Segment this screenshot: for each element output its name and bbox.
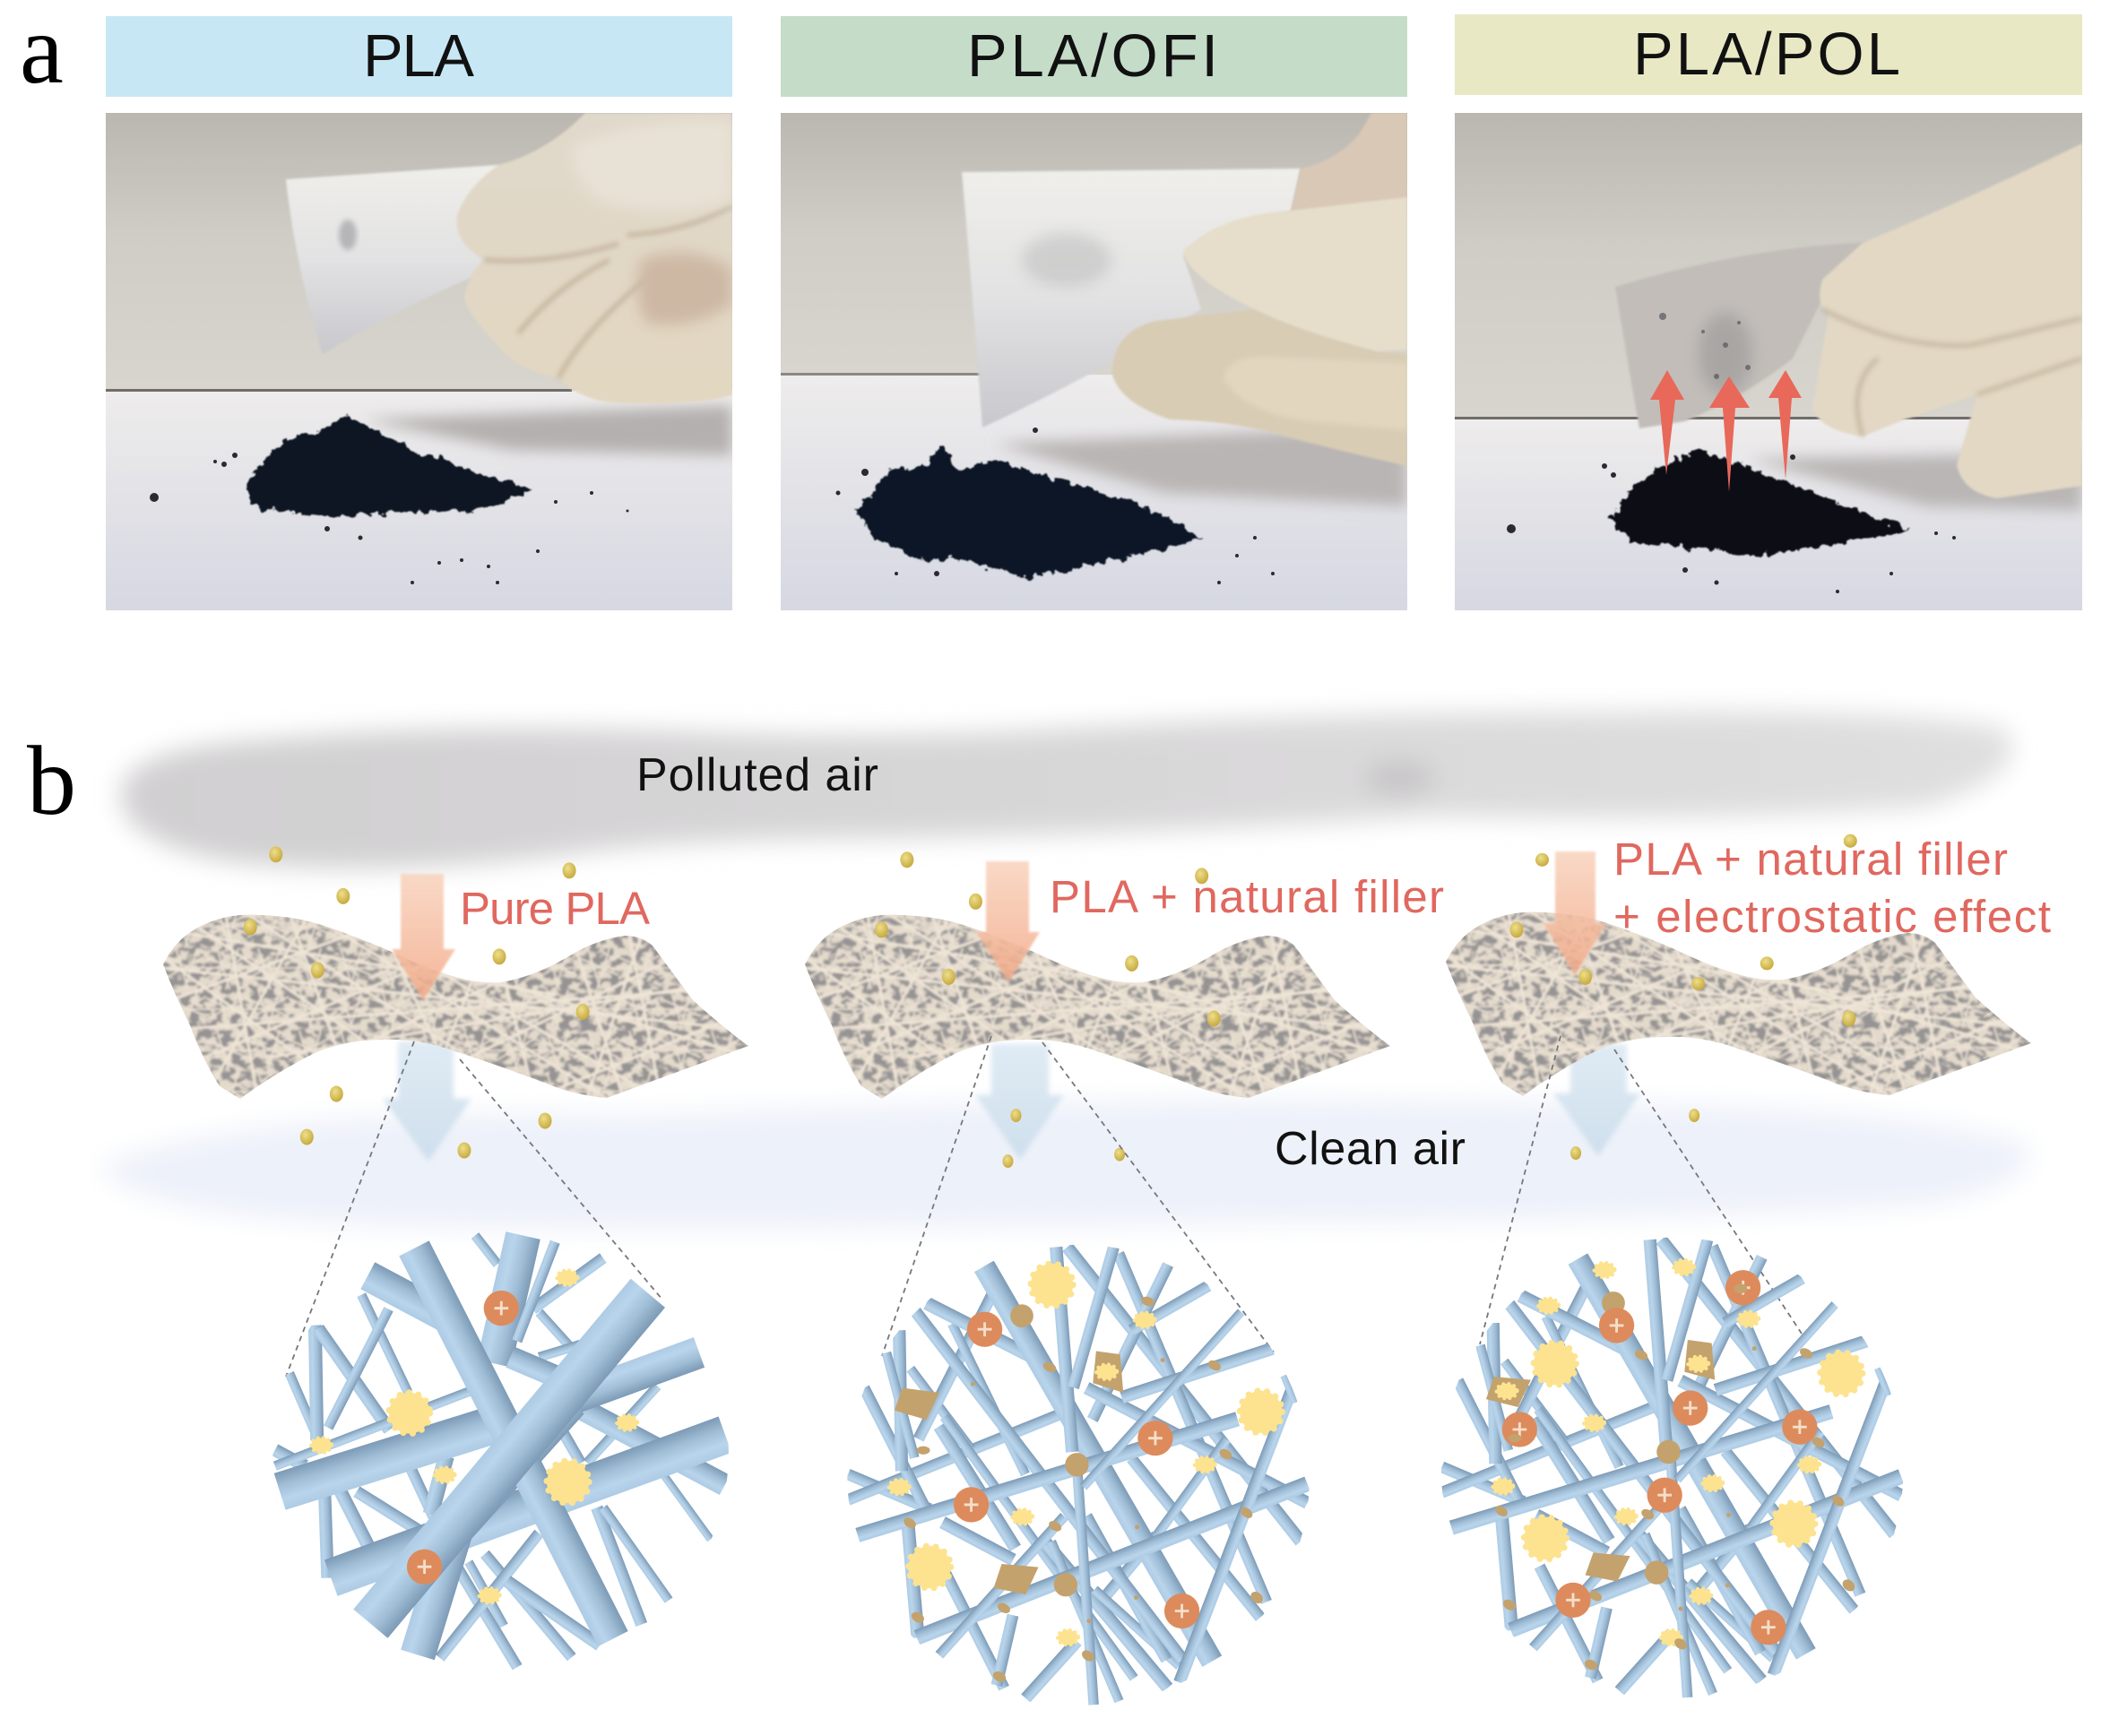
label: Clean air: Clean air bbox=[1275, 1123, 1466, 1175]
clean air band bbox=[99, 1100, 2029, 1230]
photo: PLA/OFI film above carbon powder bbox=[781, 113, 1407, 610]
membrane: PLA + natural filler bbox=[794, 901, 1404, 1111]
trapped particles bbox=[1492, 1260, 1863, 1645]
fibres bbox=[846, 1243, 1310, 1706]
membrane: PLA + natural filler + electrostatic effect bbox=[1435, 898, 2045, 1109]
label: PLA + natural filler + electrostatic effect: + electrostatic effect bbox=[1613, 891, 2051, 942]
positive charges bbox=[1502, 1270, 1817, 1645]
heading: PLA/POL: PLA/POL bbox=[1633, 21, 1900, 88]
airborne particles bbox=[244, 834, 1857, 1168]
orange polluted-air arrows bbox=[392, 851, 1606, 1000]
trapped particles bbox=[889, 1264, 1282, 1645]
panel: PLA/POL photo column bbox=[1455, 14, 2082, 610]
label: Pure PLA: Pure PLA bbox=[460, 883, 650, 934]
label: PLA + natural filler: PLA + natural filler bbox=[1050, 871, 1444, 922]
magnified fibre circle: PLA + natural filler + electrostatic effect bbox=[1440, 1236, 1904, 1697]
positive charges bbox=[407, 1291, 519, 1585]
magnified fibre circle: pure PLA bbox=[272, 1231, 731, 1670]
membrane: pure PLA bbox=[152, 901, 762, 1111]
fibres bbox=[1440, 1236, 1904, 1697]
arrows: electrostatic attraction bbox=[1650, 370, 1802, 492]
panel: PLA photo column bbox=[106, 16, 732, 610]
panel: PLA/OFI photo column bbox=[781, 16, 1407, 610]
heading: PLA/POL bbox=[1455, 14, 2082, 95]
dashed zoom guide lines bbox=[286, 1036, 1802, 1377]
trapped particles bbox=[311, 1270, 637, 1603]
filler flakes on top of charges bbox=[1508, 1283, 1747, 1652]
heading: PLA/OFI bbox=[781, 16, 1407, 97]
polluted air cloud bbox=[121, 712, 2012, 868]
photo: PLA/POL film attracting carbon powder bbox=[1455, 113, 2082, 610]
filler flakes bbox=[895, 1295, 1266, 1684]
panel letter b: b bbox=[27, 726, 76, 835]
heading: PLA/OFI: PLA/OFI bbox=[967, 22, 1218, 90]
blue clean-air arrows bbox=[383, 1041, 1640, 1162]
heading: PLA bbox=[106, 16, 732, 97]
filler flakes bbox=[1486, 1291, 1857, 1672]
photo: PLA film above carbon powder bbox=[106, 113, 732, 610]
label: Polluted air: Polluted air bbox=[636, 749, 878, 801]
label: PLA + natural filler + electrostatic effect: PLA + natural filler bbox=[1613, 833, 2008, 885]
positive charges bbox=[954, 1312, 1199, 1628]
magnified fibre circle: PLA + natural filler bbox=[846, 1243, 1310, 1706]
heading: PLA: PLA bbox=[363, 22, 474, 90]
thin and thick fibres bbox=[272, 1231, 731, 1670]
